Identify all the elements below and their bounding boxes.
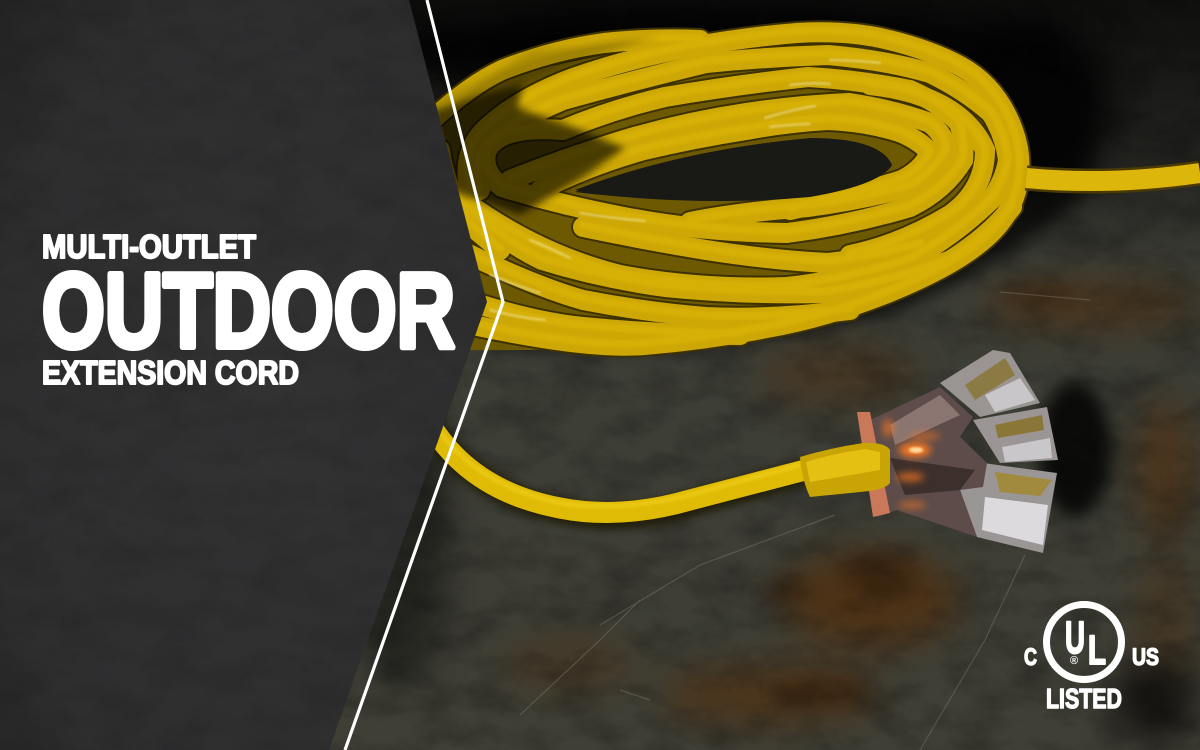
letter L: L [1088, 627, 1106, 673]
outlet: top [940, 350, 1040, 417]
cord exiting right [1026, 173, 1200, 181]
amber sleeve [800, 443, 890, 497]
UL ring [1046, 604, 1122, 680]
plug filament glow [883, 419, 941, 508]
letter U: U [1065, 612, 1085, 663]
shadow under the coil [470, 50, 1090, 350]
coil centre shade [575, 140, 892, 201]
dark angled title panel [0, 0, 487, 750]
translucent plug body [870, 387, 987, 537]
plug flange [857, 412, 890, 517]
registered mark: ® [1070, 655, 1078, 667]
letters US: US [1132, 644, 1159, 671]
listed: LISTED [1046, 683, 1122, 714]
title line 2: OUTDOOR [42, 252, 455, 370]
lower yellow cord [425, 415, 805, 517]
coil centre opening [575, 138, 892, 201]
coil shadow band [430, 84, 625, 215]
extension cord coil [425, 30, 1200, 350]
outlet: bottom [960, 463, 1057, 553]
letter C: C [1024, 644, 1037, 671]
outlet: middle [973, 407, 1058, 463]
title [42, 228, 455, 391]
rust stains on the floor [500, 281, 1200, 725]
title line 3: EXTENSION CORD [42, 354, 299, 391]
white chevron line [345, 0, 503, 750]
title line 1: MULTI-OUTLET [42, 228, 256, 265]
coil highlights [490, 60, 880, 320]
glowing triple-outlet plug [800, 350, 1058, 553]
UL listed certification mark [1024, 604, 1159, 714]
shadow beside the plug [1039, 382, 1111, 518]
coil dark mass [425, 36, 1027, 350]
